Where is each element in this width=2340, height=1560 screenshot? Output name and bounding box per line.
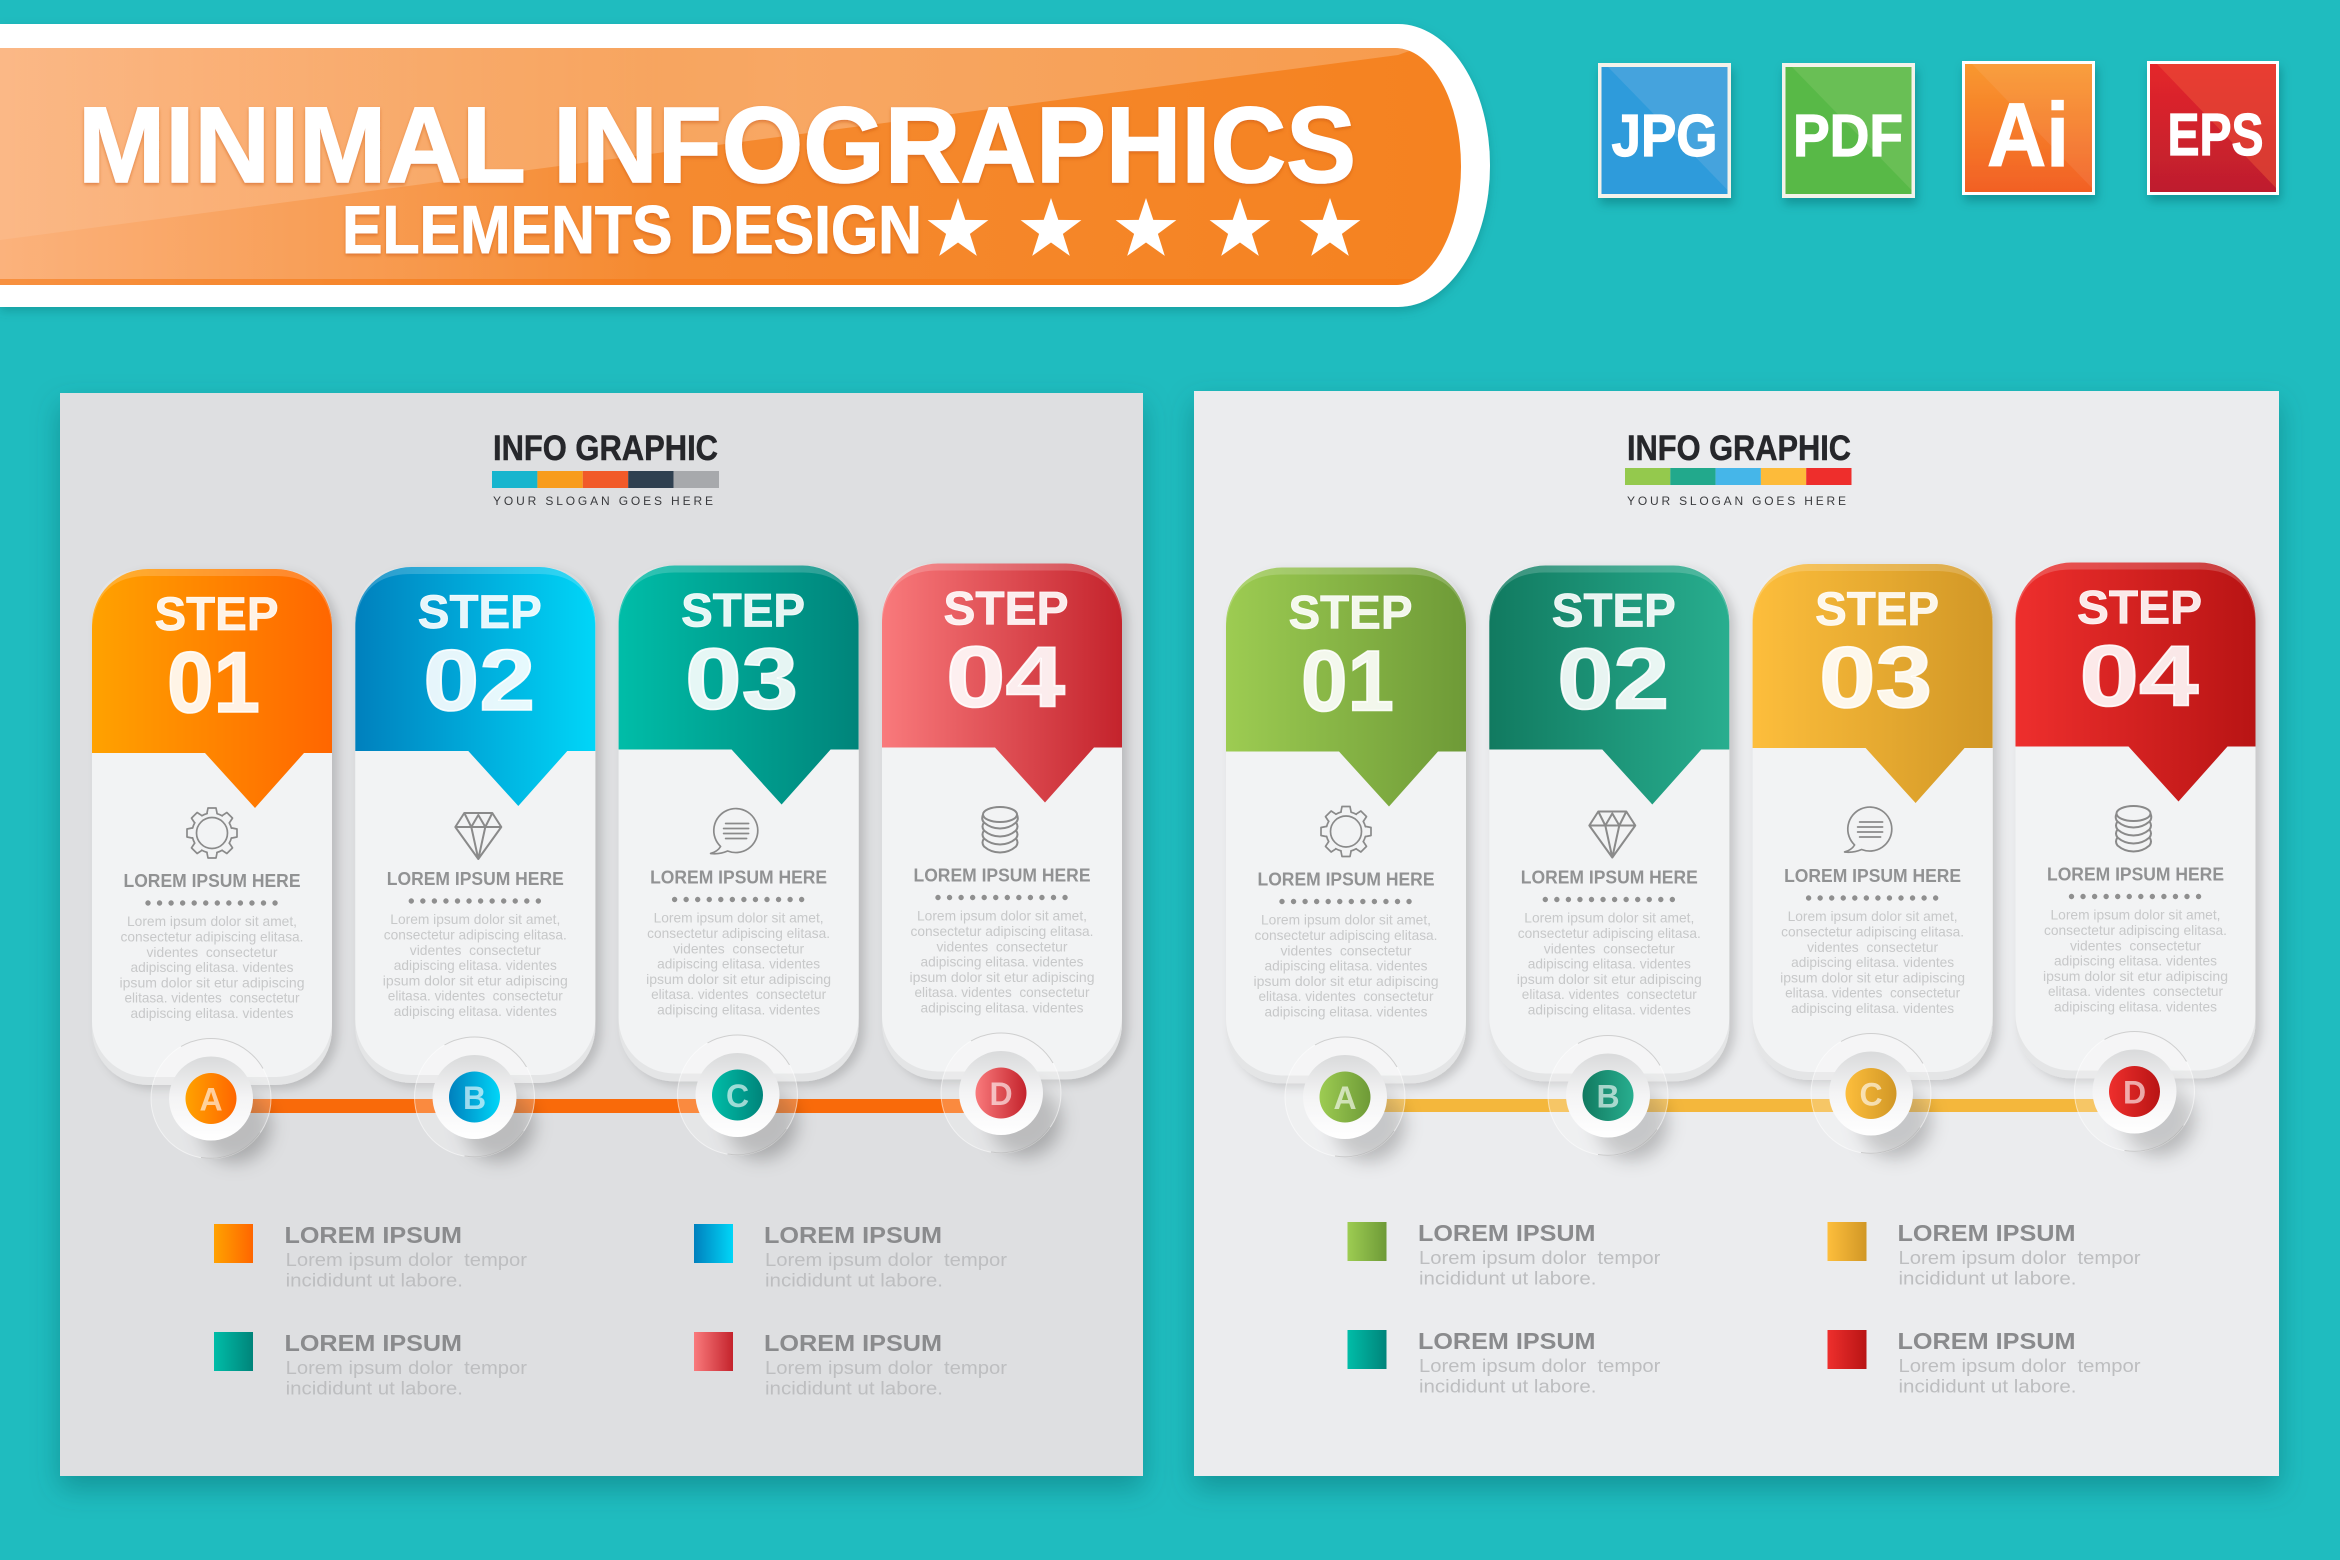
marker C: C [726,1078,749,1114]
card body [355,567,595,1083]
legend item: blue: Lorem ipsum dolor tempor [765,1250,1007,1270]
step label: STEP [1815,582,1939,635]
body text: elitasa. videntes consectetur [914,984,1090,1000]
legend item: teal: incididunt ut labore. [1419,1376,1596,1396]
heading text: INFO GRAPHIC [1627,429,1851,468]
card body [882,564,1122,1080]
coloured header [2016,562,2256,802]
marker B [414,1037,534,1161]
title banner [0,24,1490,307]
body text: adipiscing elitasa. videntes [394,957,557,973]
body text: adipiscing elitasa. videntes [657,956,820,972]
coloured header [619,566,859,804]
step label: STEP [1288,586,1412,638]
coloured header [355,567,595,806]
body text: ipsum dolor sit etur adipiscing [910,969,1095,985]
body text: adipiscing elitasa. videntes [2054,952,2217,968]
step label: STEP [2077,580,2202,634]
legend item: teal [1348,1328,1660,1396]
body text: ipsum dolor sit etur adipiscing [2043,968,2228,984]
body text: elitasa. videntes consectetur [2048,983,2223,999]
card heading: LOREM IPSUM HERE [1784,866,1961,886]
dotted divider [938,895,1066,900]
body text: ipsum dolor sit etur adipiscing [383,972,568,988]
body text [1254,912,1438,1020]
body text: adipiscing elitasa. videntes [394,1003,557,1019]
legend item: blue: incididunt ut labore. [765,1270,943,1290]
legend item: yellow [1828,1220,2140,1288]
legend item: green [1348,1220,1660,1288]
step label: STEP [418,585,542,638]
marker D: D [2123,1074,2146,1110]
body text: Lorem ipsum dolor sit amet, [1524,910,1694,926]
marker A: A [199,1082,223,1118]
slogan: YOUR SLOGAN GOES HERE [493,494,713,508]
subtitle: ELEMENTS DESIGN [342,192,922,268]
card body [2016,562,2256,1078]
body text: elitasa. videntes consectetur [1258,988,1434,1004]
five stars [928,198,1360,256]
body text: Lorem ipsum dolor sit amet, [1788,908,1958,924]
body text: ipsum dolor sit etur adipiscing [1517,971,1702,987]
body text: videntes consectetur [1280,942,1412,958]
icon: Ai [1962,61,2095,195]
body text: elitasa. videntes consectetur [124,990,300,1006]
step number: 01 [167,635,260,731]
marker A [151,1038,271,1162]
step number: 02 [423,633,535,729]
body text: adipiscing elitasa. videntes [1528,956,1691,972]
body text: adipiscing elitasa. videntes [2054,998,2217,1014]
panel heading [1625,429,1852,508]
icon: EPS: EPS [2168,102,2264,168]
legend item: red: incididunt ut labore. [765,1378,943,1398]
heading text: INFO GRAPHIC [493,429,718,468]
dotted divider [2072,894,2199,899]
legend item: green: incididunt ut labore. [1419,1268,1596,1288]
body text: elitasa. videntes consectetur [388,988,563,1004]
legend item: yellow: Lorem ipsum dolor tempor [1898,1248,2140,1268]
slogan: YOUR SLOGAN GOES HERE [1627,494,1846,508]
marker B: B [463,1080,486,1116]
body text: Lorem ipsum dolor sit amet, [654,910,824,926]
body text: elitasa. videntes consectetur [651,986,826,1002]
body text: ipsum dolor sit etur adipiscing [646,971,831,987]
icon: diamond [1589,812,1635,858]
legend item: red: Lorem ipsum dolor tempor [765,1358,1007,1378]
legend item: red: LOREM IPSUM [1898,1328,2076,1354]
body text: consectetur adipiscing elitasa. [384,926,567,942]
body text: videntes consectetur [146,944,278,960]
body text: ipsum dolor sit etur adipiscing [120,974,305,990]
step label: STEP [1552,584,1676,636]
body text: ipsum dolor sit etur adipiscing [1254,973,1439,989]
body text: videntes consectetur [673,940,804,956]
card: step 02 [355,567,595,1083]
banner gloss [0,40,1480,287]
legend item: yellow: incididunt ut labore. [1898,1268,2076,1288]
card body [619,566,859,1082]
file format icons [1598,61,2279,198]
card heading: LOREM IPSUM HERE [387,869,564,889]
step number: 01 [1301,634,1394,730]
body text [120,913,304,1021]
body text: adipiscing elitasa. videntes [657,1002,820,1018]
body text: adipiscing elitasa. videntes [920,954,1084,970]
marker C [1811,1033,1931,1158]
legend item: orange: incididunt ut labore. [286,1270,463,1290]
banner white outline [0,24,1490,307]
step number: 04 [2080,628,2199,724]
icon: JPG [1598,63,1731,198]
dotted divider [1282,899,1410,904]
icon: speech bubble [711,809,758,854]
body text: videntes consectetur [2070,938,2201,954]
body text: videntes consectetur [410,942,541,958]
legend item: red: Lorem ipsum dolor tempor [1898,1356,2140,1376]
legend item: blue: LOREM IPSUM [764,1222,942,1248]
body text: Lorem ipsum dolor sit amet, [1261,912,1431,928]
card: step 02 [1489,566,1729,1082]
colour bar [1625,468,1852,485]
body text: adipiscing elitasa. videntes [1791,954,1954,970]
dotted divider [411,898,539,904]
legend item: teal: incididunt ut labore. [286,1378,463,1398]
legend item: red [694,1330,1007,1398]
main title: MINIMAL INFOGRAPHICS [78,84,1356,205]
legend item: green: Lorem ipsum dolor tempor [1419,1248,1660,1268]
card: step 01 [92,569,332,1085]
body text: consectetur adipiscing elitasa. [1254,927,1438,943]
body text: elitasa. videntes consectetur [1785,984,1960,1000]
body text: videntes consectetur [936,938,1068,954]
step label: STEP [154,587,278,640]
body text: adipiscing elitasa. videntes [920,1000,1084,1016]
body text [1517,910,1702,1018]
card body [1753,564,1993,1080]
body text: consectetur adipiscing elitasa. [1781,924,1964,940]
card heading: LOREM IPSUM HERE [1258,870,1434,890]
marker A [1285,1037,1405,1161]
legend item: teal: Lorem ipsum dolor tempor [286,1358,527,1378]
legend item: teal: Lorem ipsum dolor tempor [1419,1356,1660,1376]
legend item: green: LOREM IPSUM [1418,1220,1596,1246]
legend item: orange: Lorem ipsum dolor tempor [286,1250,527,1270]
card: step 04 [882,564,1122,1080]
card: step 03 [1753,564,1993,1080]
dotted divider [675,897,802,902]
body text: elitasa. videntes consectetur [1522,986,1697,1002]
body text: ipsum dolor sit etur adipiscing [1780,970,1965,986]
legend [214,1222,1007,1398]
legend item: red: LOREM IPSUM [764,1330,942,1356]
timeline bar [1344,1099,2134,1112]
card: step 01 [1226,568,1466,1084]
icon: gear [1321,806,1371,856]
icon: coins [982,807,1018,852]
icon: JPG: JPG [1612,103,1718,169]
coloured header [1226,568,1466,806]
body text: adipiscing elitasa. videntes [1528,1002,1691,1018]
dotted divider [148,900,276,906]
icon: EPS [2147,61,2279,195]
icon: Ai: Ai [1987,86,2069,186]
timeline bar [211,1099,1001,1113]
marker D [941,1033,1061,1157]
coloured header [1489,566,1729,804]
body text: Lorem ipsum dolor sit amet, [2050,906,2220,922]
body text: adipiscing elitasa. videntes [130,959,294,975]
step number: 02 [1557,632,1669,728]
coloured header [1753,564,1993,803]
card body [1226,568,1466,1084]
legend item: orange: LOREM IPSUM [284,1222,462,1248]
body text: adipiscing elitasa. videntes [1264,958,1428,974]
card body [1489,566,1729,1082]
body text [910,908,1094,1016]
coloured header [882,564,1122,802]
step number: 03 [685,632,798,728]
card heading: LOREM IPSUM HERE [124,871,300,891]
legend item: red: incididunt ut labore. [1898,1376,2076,1396]
marker C [678,1035,798,1159]
banner orange fill [0,48,1461,285]
colour bar [492,471,719,488]
marker B: B [1596,1078,1620,1114]
card heading: LOREM IPSUM HERE [2047,864,2224,884]
icon: gear [187,808,237,858]
legend item: yellow: LOREM IPSUM [1898,1220,2076,1246]
body text: consectetur adipiscing elitasa. [2044,922,2227,938]
legend item: orange [214,1222,527,1290]
marker A: A [1333,1080,1357,1116]
body text [1780,908,1965,1016]
icon: PDF [1782,63,1915,198]
icon: coins [2116,806,2151,852]
panel background [1194,391,2279,1476]
body text: consectetur adipiscing elitasa. [910,923,1094,939]
step number: 04 [946,630,1065,726]
body text: videntes consectetur [1807,939,1938,955]
body text: adipiscing elitasa. videntes [130,1005,294,1021]
dotted divider [1809,895,1936,901]
step number: 03 [1819,630,1932,726]
panel: left infographic [60,393,1143,1476]
panel background [60,393,1143,1476]
legend [1348,1220,2140,1396]
body text: Lorem ipsum dolor sit amet, [917,908,1087,924]
card body [92,569,332,1085]
legend item: blue [694,1222,1007,1290]
coloured header [92,569,332,808]
body text: adipiscing elitasa. videntes [1264,1004,1428,1020]
body text: consectetur adipiscing elitasa. [1518,925,1701,941]
body text: Lorem ipsum dolor sit amet, [127,913,297,929]
body text [2043,906,2228,1014]
legend item: red [1828,1328,2140,1396]
panel heading [492,429,719,508]
legend item: teal: LOREM IPSUM [284,1330,462,1356]
card heading: LOREM IPSUM HERE [650,868,827,888]
icon: speech bubble [1845,807,1892,852]
card: step 03 [619,566,859,1082]
icon: PDF: PDF [1793,103,1903,169]
marker D: D [989,1076,1013,1112]
body text: adipiscing elitasa. videntes [1791,1000,1954,1016]
body text [383,911,568,1019]
step label: STEP [944,582,1068,634]
body text: consectetur adipiscing elitasa. [120,928,304,944]
marker B [1548,1035,1668,1160]
body text: consectetur adipiscing elitasa. [647,925,830,941]
legend item: teal [214,1330,527,1398]
body text [646,910,831,1018]
card: step 04 [2016,562,2256,1078]
dotted divider [1545,897,1673,902]
step label: STEP [681,584,805,636]
card heading: LOREM IPSUM HERE [1521,868,1698,888]
card heading: LOREM IPSUM HERE [914,866,1090,886]
body text: videntes consectetur [1544,940,1675,956]
icon: diamond [455,813,501,859]
legend item: teal: LOREM IPSUM [1418,1328,1596,1354]
marker C: C [1859,1076,1883,1112]
panel: right infographic [1194,391,2279,1476]
body text: Lorem ipsum dolor sit amet, [390,911,560,927]
marker D [2074,1031,2194,1156]
